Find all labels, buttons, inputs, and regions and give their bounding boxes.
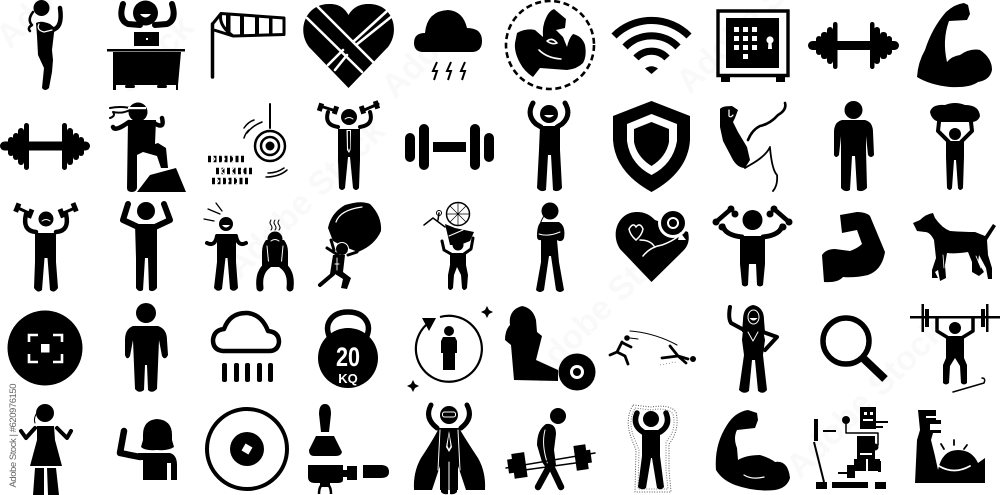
icon: flexed arm in dashed circle xyxy=(506,1,594,89)
icon: superhero with cape xyxy=(414,405,485,494)
icon: man with dumbbells wide xyxy=(712,206,792,286)
icon: stamp and portafilter xyxy=(308,404,389,494)
icon: woman in hijab with hand on hip xyxy=(729,305,777,393)
icon: man with arms raised xyxy=(530,103,568,191)
icon: disc xyxy=(207,409,287,489)
icon: shield xyxy=(613,101,690,192)
icon: wifi signal xyxy=(614,20,689,74)
icon: man lifting bicycle xyxy=(424,202,474,290)
text: Adobe Stock xyxy=(779,312,953,486)
icon: storm cloud xyxy=(414,10,482,80)
text: Adobe Stock xyxy=(219,112,393,286)
icon: angular bicep xyxy=(822,212,885,282)
icon: standing man large xyxy=(125,303,168,392)
text: Adobe Stock xyxy=(519,217,693,391)
icon: man deadlifting barbell xyxy=(506,408,595,487)
text: Adobe xyxy=(374,4,475,106)
icon: robot on treadmill xyxy=(814,407,888,489)
icon: man inside rotate arrow xyxy=(407,306,493,392)
icon: man pushing boulder xyxy=(320,202,381,289)
icon: shocked man and tired man xyxy=(204,203,290,291)
icon: kettlebell 20 KQ xyxy=(318,312,378,388)
icon: muscle arm with vein line xyxy=(720,103,785,191)
icon: windsock xyxy=(212,14,284,77)
icon: magnifying glass xyxy=(823,318,885,379)
icon: dumbbell xyxy=(405,124,494,170)
icon: kettlebell 20 KQ: KQ xyxy=(338,371,358,386)
icon: large bicep xyxy=(917,3,992,87)
icon: arm holding disc xyxy=(505,306,596,390)
icon: standing man xyxy=(834,101,874,191)
icon: runner and diver xyxy=(610,331,696,365)
icon: safe xyxy=(718,11,788,82)
credit text: Adobe Stock | #620976150 xyxy=(8,384,19,488)
icon: woman flexing xyxy=(29,0,61,90)
icon: barbell left xyxy=(0,123,90,170)
icon: bicep lower right xyxy=(716,410,790,490)
icon: barbell xyxy=(808,22,899,69)
icon: woman in dress xyxy=(21,404,71,495)
icon: heart with ribbon xyxy=(303,4,394,88)
icon: target with tire tracks xyxy=(208,104,287,184)
icon: man lifting dumbbells xyxy=(13,202,79,292)
icon: weightlifter xyxy=(910,304,1000,392)
icon: man cheering at desk xyxy=(107,0,185,90)
icon: woman with arms crossed xyxy=(536,202,564,292)
icon: climber with headband xyxy=(110,102,186,192)
icon: focus button xyxy=(8,310,82,386)
icon: fist rising over dome xyxy=(915,410,985,483)
icon: businessman lifting dumbbells xyxy=(317,100,380,190)
icon: man flexing arms xyxy=(123,202,170,291)
icon: man holding rock overhead xyxy=(930,103,980,190)
icon: dog xyxy=(913,213,996,281)
icon: rain cloud xyxy=(213,313,279,382)
icon: kettlebell 20 KQ: 20 xyxy=(336,342,360,372)
icon: woman flexing arm from behind xyxy=(120,419,177,480)
text: Stock xyxy=(109,8,201,101)
icon: heart with flexed arm xyxy=(616,208,689,282)
icon: man in dotted outline xyxy=(628,405,677,492)
